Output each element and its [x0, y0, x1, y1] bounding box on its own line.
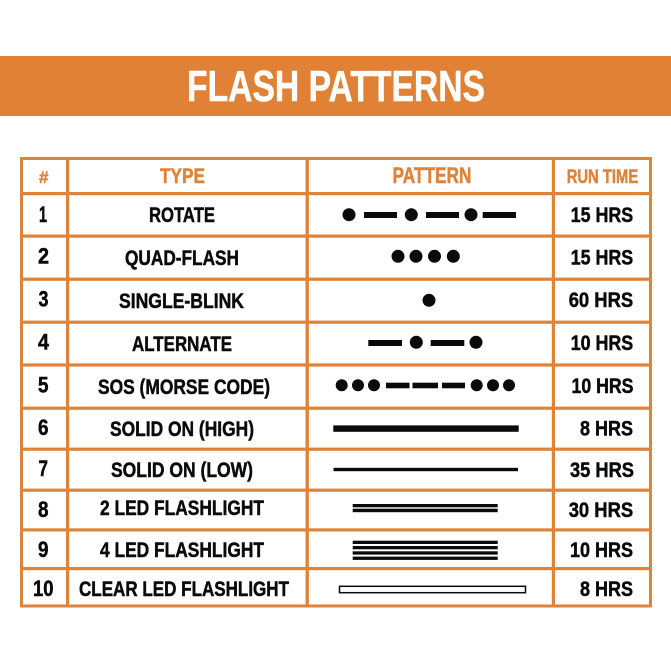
row 9: 4 LED flashlight: 9: [38, 537, 48, 562]
row 10: clear LED flashlight: 8 HRS: [580, 577, 633, 601]
row 5: SOS: 10 HRS: [572, 374, 634, 398]
row 4: alternate: 10 HRS: [571, 331, 633, 355]
row 8: 2 LED flashlight: [38, 496, 633, 522]
header row: [39, 163, 638, 188]
row 8: 2 LED flashlight: 2 LED FLASHLIGHT: [100, 496, 264, 520]
row 9: 4 LED flashlight: 10 HRS: [570, 538, 633, 562]
pattern: dash dot x2: [368, 336, 482, 349]
row 1: rotate: [39, 202, 633, 227]
row 10: clear LED flashlight: [33, 576, 633, 601]
pattern: dot dash x3: [342, 208, 516, 221]
table grid: [20, 157, 652, 608]
column header: type: TYPE: [160, 164, 205, 188]
title: FLASH PATTERNS: [187, 62, 485, 111]
row 7: solid on low: 35 HRS: [570, 458, 634, 482]
row 10: clear LED flashlight: CLEAR LED FLASHLIGHT: [79, 577, 289, 601]
column header: pattern: PATTERN: [392, 163, 472, 188]
pattern: four lines: [353, 541, 498, 560]
row 3: single-blink: 60 HRS: [569, 288, 633, 312]
pattern: single dot: [422, 294, 436, 307]
title banner: [0, 56, 671, 116]
row 6: solid on high: [38, 415, 633, 441]
row 7: solid on low: 7: [38, 456, 48, 481]
row 2: quad-flash: 2: [38, 244, 49, 268]
row 7: solid on low: [38, 456, 634, 482]
row 3: single-blink: SINGLE-BLINK: [119, 289, 244, 313]
row 10: clear LED flashlight: 10: [33, 576, 54, 601]
column header: number: #: [39, 168, 49, 187]
row 5: SOS: 5: [38, 372, 48, 398]
pattern: thin line: [334, 468, 518, 471]
pattern: outlined bar: [340, 586, 526, 593]
row 8: 2 LED flashlight: 8: [38, 497, 48, 522]
row 1: rotate: 1: [39, 202, 47, 227]
row 5: SOS: SOS (MORSE CODE): [98, 375, 270, 399]
row 2: quad-flash: QUAD-FLASH: [125, 246, 239, 270]
row 8: 2 LED flashlight: 30 HRS: [569, 498, 633, 522]
pattern: morse SOS: [336, 379, 515, 391]
row 4: alternate: ALTERNATE: [132, 332, 232, 356]
row 2: quad-flash: 15 HRS: [571, 246, 633, 270]
row 4: alternate: [38, 330, 633, 356]
pattern: four dots: [392, 250, 460, 263]
row 7: solid on low: SOLID ON (LOW): [111, 458, 253, 482]
row 1: rotate: ROTATE: [149, 203, 215, 227]
row 9: 4 LED flashlight: [38, 537, 633, 562]
row 3: single-blink: 3: [38, 286, 48, 312]
row 1: rotate: 15 HRS: [571, 203, 633, 227]
row 2: quad-flash: [38, 244, 633, 270]
row 4: alternate: 4: [38, 330, 50, 354]
row 5: SOS: [38, 372, 634, 399]
row 6: solid on high: 6: [38, 415, 48, 440]
pattern: two lines: [353, 504, 498, 512]
row 6: solid on high: 8 HRS: [580, 417, 633, 441]
row 9: 4 LED flashlight: 4 LED FLASHLIGHT: [100, 538, 264, 562]
row 3: single-blink: [38, 286, 633, 313]
pattern: thick line: [333, 425, 519, 432]
row 6: solid on high: SOLID ON (HIGH): [110, 417, 254, 441]
column header: run time: RUN TIME: [567, 166, 638, 188]
